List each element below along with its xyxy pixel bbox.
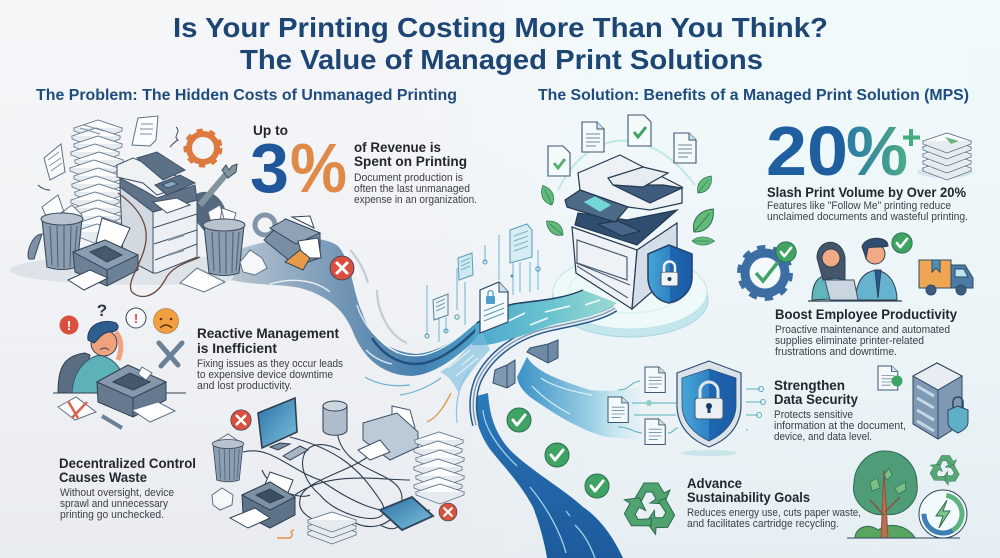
title: Is Your Printing Costing More Than You Think? <box>173 12 828 43</box>
text: decentralized control: Without oversight, device <box>60 487 174 499</box>
text: strengthen data security: information at the document, <box>774 420 906 432</box>
text: boost employee productivity: supplies eliminate printer-related <box>775 335 924 347</box>
text: advance sustainability goals: Sustainability Goals <box>687 490 810 505</box>
stat: 20 percent plus <box>766 112 920 190</box>
icon: reduced paper stack <box>917 133 973 180</box>
central glow streaks <box>440 332 490 392</box>
stat: up to 3 percent <box>250 122 477 207</box>
icon: delivery truck <box>919 260 973 295</box>
illustration: frustrated employee: ! <box>67 318 71 333</box>
green check markers <box>507 408 609 498</box>
crossed paper <box>58 397 96 420</box>
document icons and circuits <box>608 367 766 444</box>
stat: up to 3 percent: Spent on Printing <box>354 154 467 169</box>
heading: the solution: The Solution: Benefits of a Managed Print Solution (MPS) <box>538 87 969 104</box>
central river flow <box>10 238 640 558</box>
tools <box>159 343 182 366</box>
solution illustration: managed printer <box>538 115 719 309</box>
small printer <box>68 218 138 290</box>
bridge surface <box>472 290 617 345</box>
stat: up to 3 percent: often the last unmanaged <box>354 183 470 195</box>
tangled cables <box>243 430 430 530</box>
stat: up to 3 percent: expense in an organization. <box>354 194 477 206</box>
light stream toward security <box>517 357 640 440</box>
database <box>323 401 347 435</box>
icon: tree <box>847 451 960 538</box>
text: strengthen data security: device, and data level. <box>774 431 872 443</box>
text: boost employee productivity: frustrations and downtime. <box>775 346 897 358</box>
text: strengthen data security <box>774 378 906 443</box>
head <box>91 330 117 356</box>
trash can with waste, right <box>203 205 245 276</box>
tablet <box>380 497 433 530</box>
leaves <box>538 173 719 245</box>
icon: man <box>855 238 897 300</box>
heading: the problem: The Problem: The Hidden Costs of Unmanaged Printing <box>36 87 457 104</box>
text: reactive management: to expensive device downtime <box>197 369 333 381</box>
text: reactive management: Reactive Management <box>197 326 339 341</box>
text: boost employee productivity: Boost Employee Productivity <box>775 307 957 322</box>
title <box>173 12 828 75</box>
text: advance sustainability goals: Reduces energy use, cuts paper waste, <box>687 507 861 519</box>
text: advance sustainability goals: and facilitates cartridge recycling. <box>687 518 839 530</box>
icon: laptop <box>825 280 858 300</box>
crumpled paper <box>212 488 233 510</box>
bridge supports <box>527 340 558 363</box>
printer <box>358 406 418 460</box>
stat: up to 3 percent: Document production is <box>354 172 463 184</box>
stat: 20 percent plus: 20 <box>766 112 848 190</box>
orange squiggle <box>277 530 294 538</box>
documents <box>308 512 356 544</box>
icon: small recycling <box>927 456 962 487</box>
text: slash print volume: Features like "Follow Me" printing reduce <box>767 200 951 212</box>
document with lock <box>480 282 508 333</box>
text: advance sustainability goals <box>687 476 861 530</box>
body <box>72 355 124 393</box>
broken printer <box>240 215 321 275</box>
icon: woman <box>812 242 850 300</box>
text: slash print volume: unclaimed documents and wasteful printing. <box>767 211 968 223</box>
icon: gear with check <box>740 242 796 298</box>
icon: check <box>892 233 912 253</box>
stream from the problem side <box>232 238 482 376</box>
text: reactive management: is Inefficient <box>197 341 278 356</box>
illustration: frustrated employee <box>53 301 186 428</box>
orbit <box>558 141 695 190</box>
paper stack <box>70 120 123 244</box>
paper stack <box>414 432 464 504</box>
stat: up to 3 percent: % <box>290 129 347 207</box>
illustration: device sprawl <box>212 398 464 544</box>
red cross <box>439 503 457 521</box>
productivity icons <box>740 233 973 301</box>
text: reactive management: and lost productivity. <box>197 380 292 392</box>
trash can with paper, left <box>28 195 83 270</box>
printer <box>230 472 295 528</box>
red cross marker <box>330 256 354 280</box>
floating pages <box>38 116 178 190</box>
icon: recycling symbol <box>618 483 680 538</box>
illustration: frustrated employee: ! <box>134 311 138 326</box>
text: strengthen data security: Data Security <box>774 392 858 407</box>
dark lower stream <box>473 393 623 558</box>
large shield <box>677 361 741 447</box>
text: slash print volume: Slash Print Volume by Over 20% <box>767 185 966 200</box>
icon: secure server <box>878 363 968 439</box>
text: slash print volume <box>767 185 968 223</box>
loose pages <box>180 268 225 292</box>
text: decentralized control: Decentralized Control <box>59 456 196 471</box>
problem illustration: cluttered printers and waste <box>28 116 354 296</box>
copier <box>117 152 197 273</box>
tangled cables <box>118 193 200 296</box>
data security illustration <box>608 361 766 456</box>
monitor <box>258 398 308 460</box>
text: reactive management <box>197 326 343 392</box>
text: reactive management: Fixing issues as they occur leads <box>197 358 343 370</box>
stat: up to 3 percent: 3 <box>250 129 289 207</box>
digital data streams and documents <box>425 224 540 342</box>
floating documents <box>548 115 696 176</box>
chair <box>58 353 90 393</box>
stat: up to 3 percent: of Revenue is <box>354 140 441 155</box>
text: decentralized control <box>59 456 196 521</box>
text: boost employee productivity <box>775 307 957 358</box>
illustration: frustrated employee: ? <box>97 301 107 320</box>
printer platform <box>552 255 708 337</box>
stat: 20 percent plus: % <box>846 112 908 190</box>
title: The Value of Managed Print Solutions <box>240 44 763 75</box>
desk <box>53 392 186 394</box>
text: strengthen data security: Protects sensitive <box>774 409 853 421</box>
text: decentralized control: Causes Waste <box>59 470 147 485</box>
wrench <box>102 416 122 428</box>
printer body <box>565 155 682 309</box>
back pile and wrench <box>190 164 237 232</box>
stat: up to 3 percent: Up to <box>253 122 288 138</box>
bridge rail <box>473 308 615 425</box>
text: decentralized control: sprawl and unnecessary <box>60 498 168 510</box>
frustration symbols <box>60 316 78 334</box>
text: strengthen data security: Strengthen <box>774 378 845 393</box>
printer <box>97 365 166 417</box>
text: advance sustainability goals: Advance <box>687 476 742 491</box>
security shield <box>648 245 692 303</box>
trash <box>212 434 244 482</box>
icon: energy gauge <box>917 488 969 540</box>
text: boost employee productivity: Proactive maintenance and automated <box>775 324 950 336</box>
icon: orange gear <box>186 131 220 165</box>
sustainability illustration <box>847 451 969 540</box>
text: decentralized control: printing go unchecked. <box>60 509 164 521</box>
